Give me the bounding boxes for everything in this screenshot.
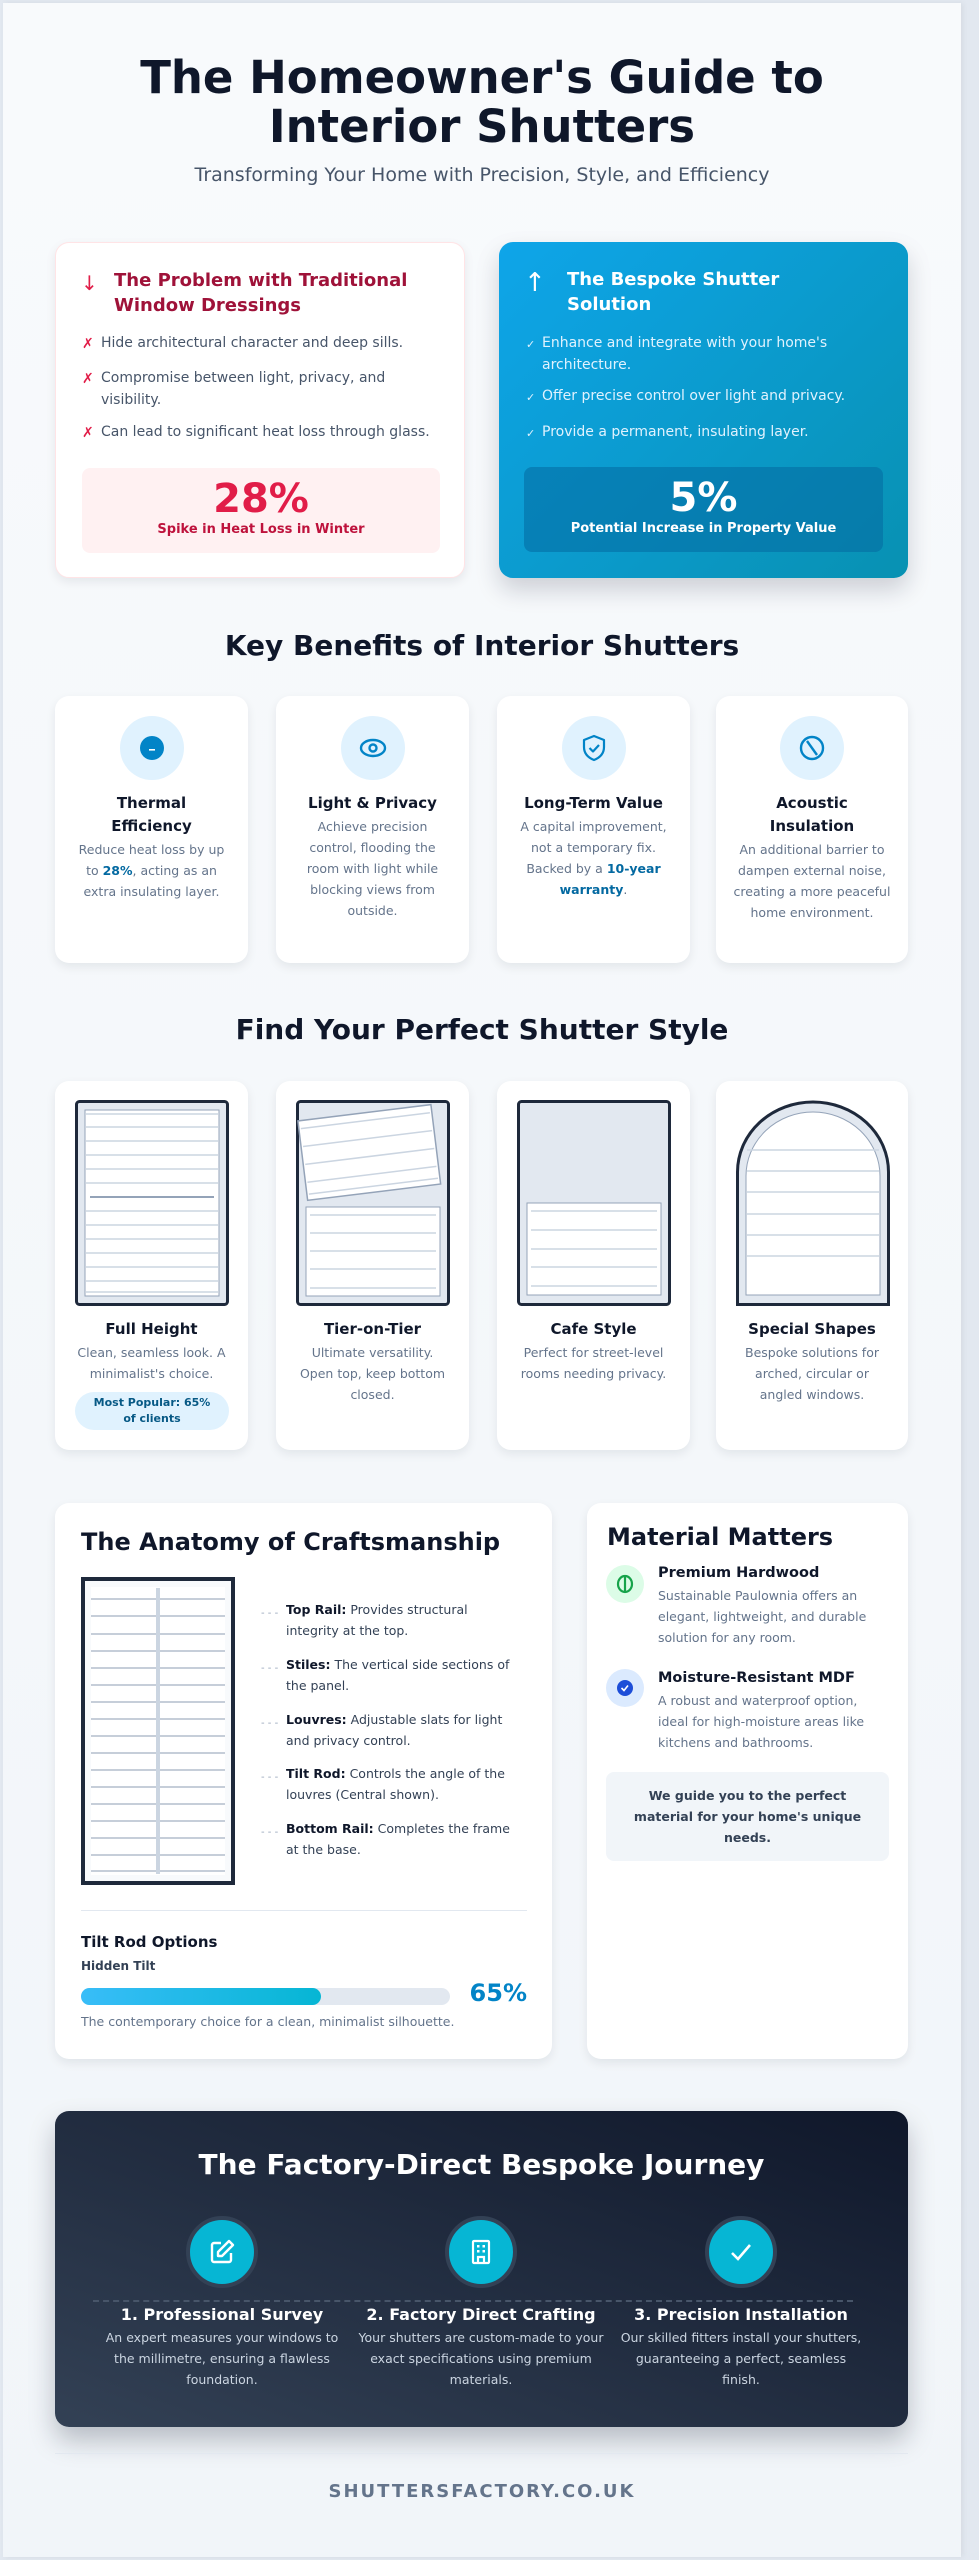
style: full height: Clean, seamless look. A minimalist's choice. (77, 1345, 226, 1381)
icon: shield (562, 716, 626, 780)
problem list: Hide architectural character and deep sills. (101, 335, 403, 351)
benefit: thermal: Thermal (117, 794, 186, 812)
label: tilt rod: - - - (261, 1772, 278, 1783)
style: tier on tier: Ultimate versatility. Open top, keep bottom closed. (300, 1345, 445, 1402)
step 3: 3. Precision Installation (634, 2305, 848, 2324)
style: tier on tier: Tier-on-Tier (324, 1320, 421, 1338)
solution heading: The Bespoke Shutter Solution (567, 269, 779, 315)
step 1 (106, 2305, 338, 2387)
benefit: light (276, 696, 469, 963)
label: louvres: Louvres: Adjustable slats for light and privacy control. (286, 1712, 502, 1748)
benefit: light: Light & Privacy (308, 794, 437, 812)
label: louvres: - - - (261, 1718, 278, 1729)
material: mdf: A robust and waterproof option, ideal for high-moisture areas like kitchens and bathrooms. (658, 1693, 864, 1750)
style: special shapes: Special Shapes (748, 1320, 876, 1338)
stat: 5%: 5% (670, 475, 737, 521)
illustration: cafe (517, 1100, 671, 1306)
problem list: ✗ (82, 336, 94, 352)
journey heading: The Factory-Direct Bespoke Journey (199, 2148, 764, 2181)
label: tilt rod: Tilt Rod: Controls the angle of the louvres (Central shown). (286, 1766, 505, 1802)
benefit: acoustic (716, 696, 908, 963)
benefit: thermal: Reduce heat loss by up to 28%, acting as an extra insulating layer. (79, 842, 224, 899)
solution list: Provide a permanent, insulating layer. (542, 424, 809, 440)
subtitle: Transforming Your Home with Precision, Style, and Efficiency (194, 164, 770, 186)
label: top rail: - - - (261, 1608, 278, 1619)
benefit: acoustic: Insulation (770, 817, 854, 835)
benefit: value: A capital improvement, not a temporary fix. Backed by a 10-year warranty. (520, 819, 667, 897)
stat: 28%: 28% (213, 476, 309, 522)
label: bottom rail: Bottom Rail: Completes the frame at the base. (286, 1821, 510, 1857)
value: 65%: 65% (470, 1979, 527, 2007)
problem list: Compromise between light, privacy, and visibility. (101, 370, 385, 408)
panel: journey (55, 2111, 908, 2427)
solution list: ✓ (526, 427, 535, 440)
icon: acoustic (780, 716, 844, 780)
icon: hardwood (606, 1565, 644, 1603)
material: mdf: Moisture-Resistant MDF (658, 1670, 855, 1686)
step 2: 2. Factory Direct Crafting (366, 2305, 596, 2324)
tilt rod options: Tilt Rod Options (81, 1933, 217, 1951)
style: special shapes: Bespoke solutions for arched, circular or angled windows. (745, 1345, 879, 1402)
footer: SHUTTERSFACTORY.CO.UK (328, 2481, 635, 2502)
icon: down arrow: ↓ (81, 271, 98, 295)
style: cafe (497, 1081, 690, 1450)
heading: key benefits: Key Benefits of Interior Shutters (225, 629, 739, 662)
title: Interior Shutters (269, 100, 695, 153)
benefit: acoustic: Acoustic (776, 794, 848, 812)
panel: problem (55, 242, 465, 578)
problem list: Can lead to significant heat loss through glass. (101, 424, 430, 440)
callout: guidance: We guide you to the perfect material for your home's unique needs. (634, 1788, 861, 1845)
icon: check (705, 2216, 777, 2288)
panel: material matters (587, 1503, 908, 2059)
problem list (82, 335, 430, 441)
style: tier on tier (276, 1081, 469, 1450)
stat: 28% (82, 468, 440, 553)
problem list: ✗ (82, 371, 94, 387)
panel: anatomy (55, 1503, 552, 2059)
progress bar: 65% (81, 1988, 450, 2005)
tilt rod options (80, 1933, 527, 2029)
benefit: acoustic: An additional barrier to dampen external noise, creating a more peaceful home environment. (734, 842, 890, 920)
label: top rail: Top Rail: Provides structural integrity at the top. (286, 1602, 468, 1638)
stat: 5% (524, 467, 883, 552)
style: special shapes (716, 1081, 908, 1450)
heading: shutter styles: Find Your Perfect Shutter Style (236, 1013, 728, 1046)
step 1: An expert measures your windows to the millimetre, ensuring a flawless foundation. (106, 2330, 338, 2387)
icon: eye (340, 716, 404, 780)
solution list: Offer precise control over light and privacy. (542, 388, 845, 404)
style: cafe: Cafe Style (550, 1320, 637, 1338)
icon: thermal (120, 716, 184, 780)
badge: most popular: Most Popular: 65% (94, 1396, 210, 1409)
icon: mdf (606, 1669, 644, 1707)
label: stiles: - - - (261, 1663, 278, 1674)
solution list: ✓ (526, 338, 535, 351)
icon: factory (445, 2216, 517, 2288)
benefit: thermal (55, 696, 248, 963)
icon: survey (186, 2216, 258, 2288)
label: bottom rail: - - - (261, 1827, 278, 1838)
problem list: ✗ (82, 425, 94, 441)
material heading: Material Matters (607, 1523, 833, 1551)
badge: most popular (75, 1392, 229, 1430)
step 2 (358, 2305, 604, 2387)
solution list: Enhance and integrate with your home's architecture. (542, 335, 827, 373)
title: The Homeowner's Guide to (140, 51, 824, 104)
style: full height (55, 1081, 248, 1450)
stat: 5%: Potential Increase in Property Value (571, 521, 836, 536)
material: hardwood: Premium Hardwood (658, 1565, 819, 1581)
problem heading: The Problem with Traditional Window Dressings (114, 270, 407, 316)
step 1: 1. Professional Survey (121, 2305, 323, 2324)
badge: most popular: of clients (123, 1412, 181, 1425)
icon: up arrow: ↑ (524, 268, 546, 298)
benefit: thermal: Efficiency (111, 817, 192, 835)
callout: guidance (606, 1772, 889, 1861)
step 2: Your shutters are custom-made to your exact specifications using premium materials. (359, 2330, 603, 2387)
step 3 (621, 2305, 861, 2387)
illustration: tier on tier (296, 1100, 450, 1306)
solution list: ✓ (526, 391, 535, 404)
material: hardwood: Sustainable Paulownia offers an elegant, lightweight, and durable solution for any room. (658, 1588, 866, 1645)
style: cafe: Perfect for street-level rooms needing privacy. (521, 1345, 666, 1381)
style: full height: Full Height (105, 1320, 198, 1338)
diagram: shutter anatomy (81, 1577, 235, 1885)
solution list (526, 335, 845, 440)
tilt rod options: The contemporary choice for a clean, minimalist silhouette. (81, 2014, 454, 2029)
illustration: full height (75, 1100, 229, 1306)
label: stiles: Stiles: The vertical side sections of the panel. (286, 1657, 509, 1693)
tilt rod options: Hidden Tilt (81, 1959, 155, 1973)
benefit: value (497, 696, 690, 963)
panel: solution (499, 242, 908, 578)
stat: 28%: Spike in Heat Loss in Winter (157, 522, 365, 537)
step 3: Our skilled fitters install your shutters, guaranteeing a perfect, seamless finish. (621, 2330, 861, 2387)
illustration: arch (736, 1100, 890, 1306)
benefit: light: Achieve precision control, flooding the room with light while blocking views from outside. (307, 819, 438, 918)
benefit: value: Long-Term Value (524, 794, 663, 812)
anatomy heading: The Anatomy of Craftsmanship (81, 1528, 500, 1556)
title (140, 51, 824, 153)
